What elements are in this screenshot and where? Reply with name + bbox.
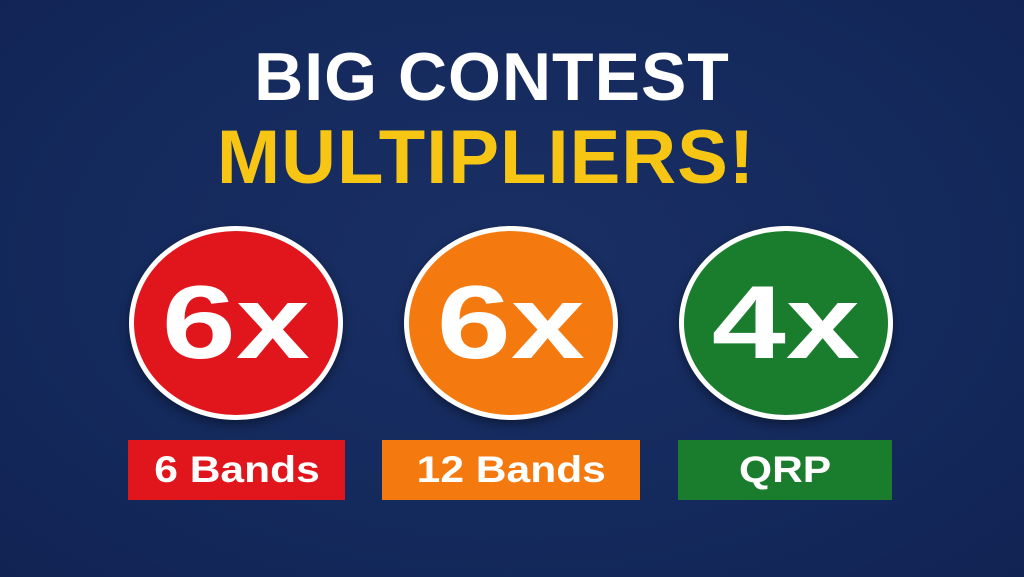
title: BIG CONTEST [254,39,730,115]
circle: orange 6x: 6x [437,264,585,380]
label: 6 Bands: 6 Bands [154,449,319,490]
subtitle: MULTIPLIERS! [217,115,755,200]
label: 12 Bands [382,440,640,500]
label: 6 Bands [128,440,345,500]
label: QRP: QRP [739,449,831,490]
circle: orange 6x [404,226,618,420]
circle: green 4x [679,226,893,420]
circle: green 4x: 4x [712,264,860,380]
label: 12 Bands: 12 Bands [416,449,606,490]
circle: red 6x [129,226,343,420]
label: QRP [678,440,892,500]
circle: red 6x: 6x [162,264,310,380]
